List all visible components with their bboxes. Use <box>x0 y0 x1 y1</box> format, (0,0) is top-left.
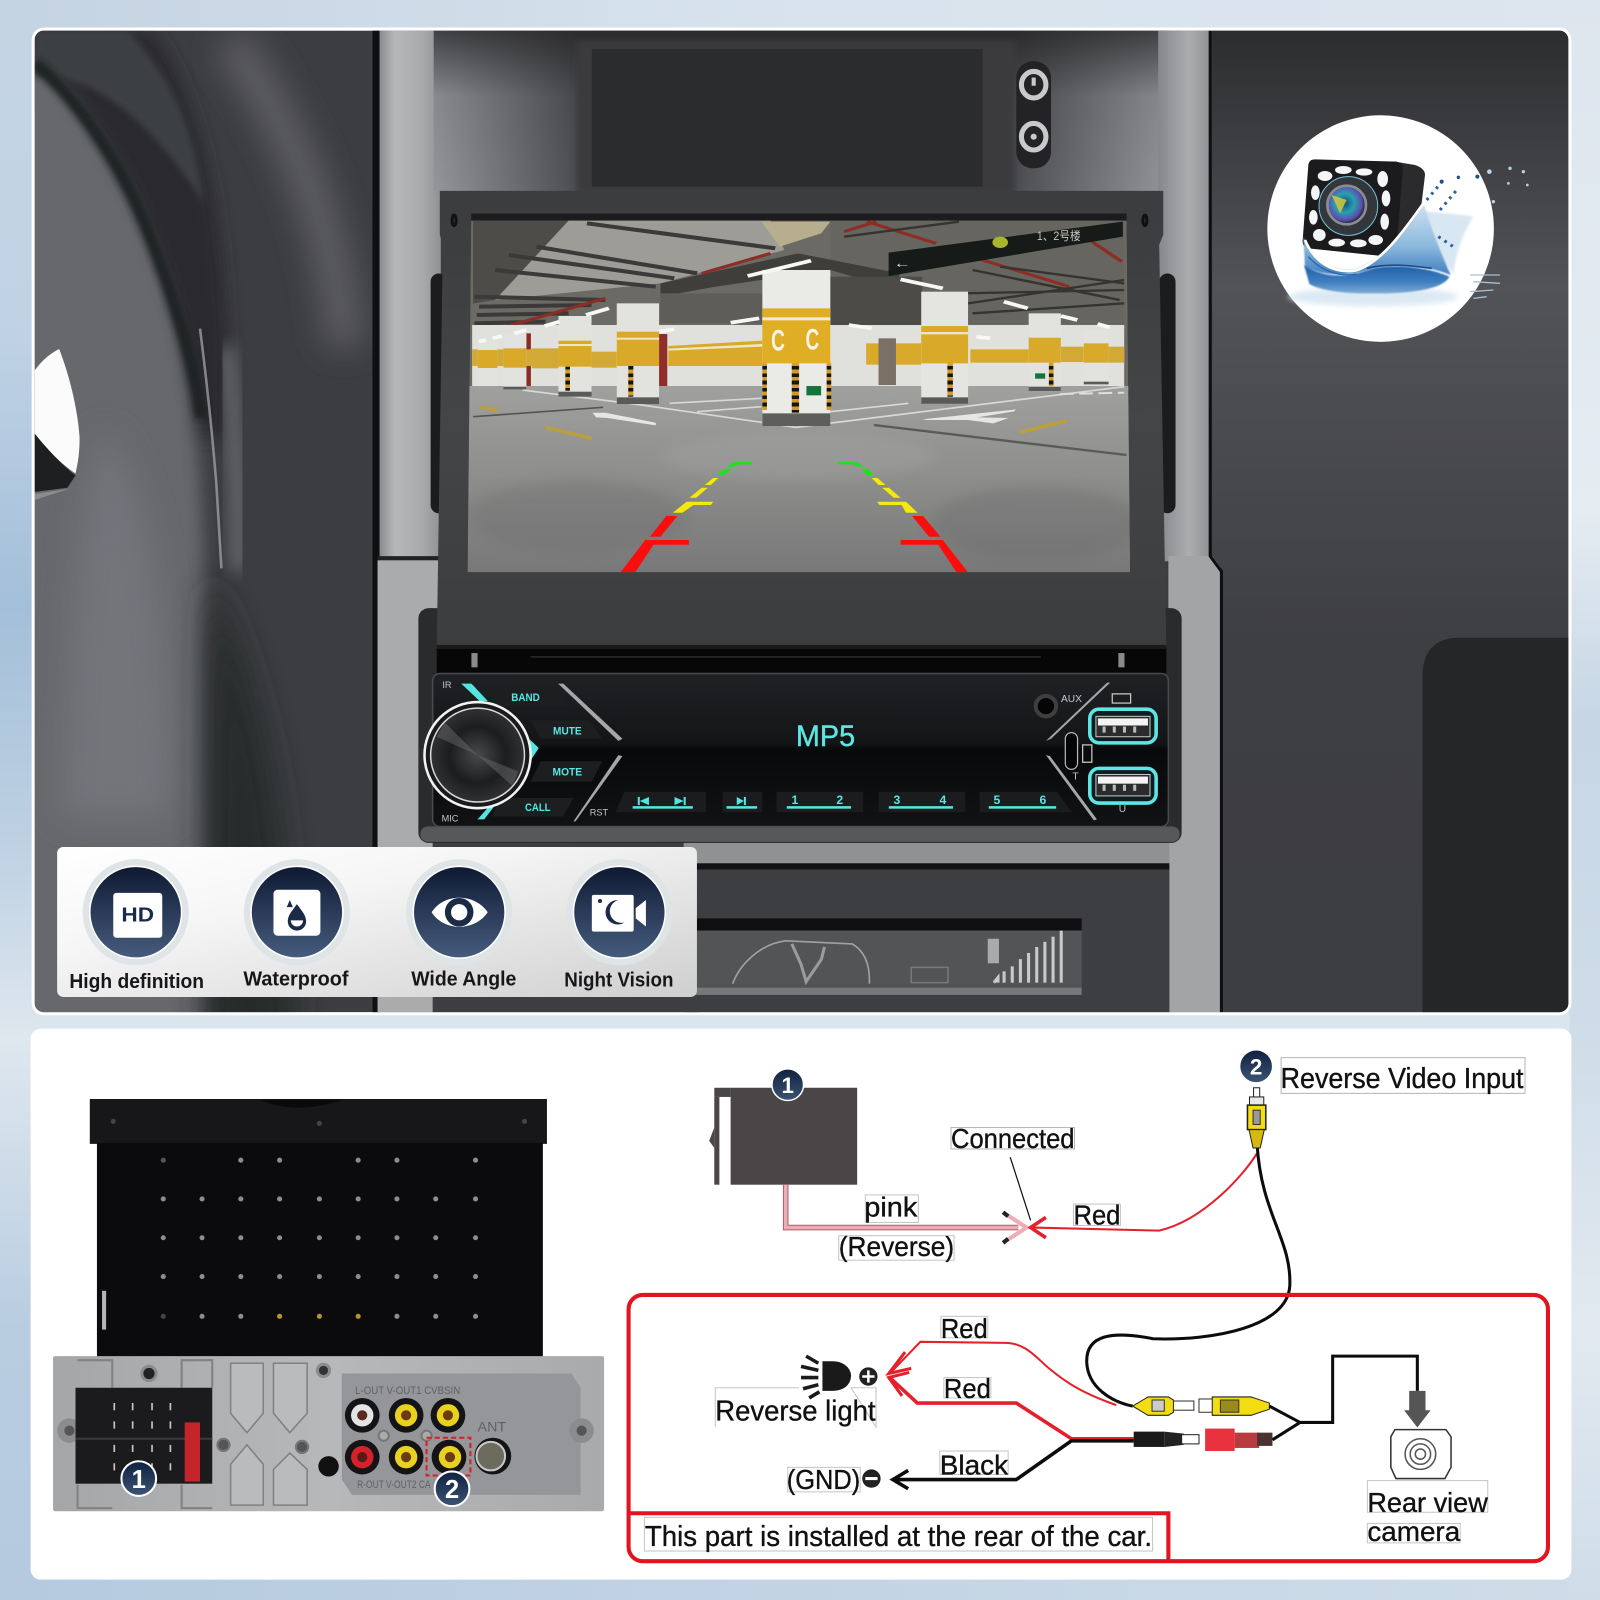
aluminium rear plate <box>53 1356 604 1511</box>
badge 1: 1 <box>782 1073 794 1098</box>
faceplate labels: CALL <box>525 802 551 814</box>
icon: waterproof rear camera <box>1267 115 1529 342</box>
label: rear view camera: camera <box>1367 1516 1461 1547</box>
badge 2 on photo: 2 <box>445 1476 459 1504</box>
faceplate labels: BAND <box>511 692 540 704</box>
panel: wiring guide <box>31 1029 1571 1580</box>
icon: ground minus <box>862 1469 881 1488</box>
label: rear view camera: Rear view <box>1367 1487 1488 1518</box>
labels <box>644 1058 1525 1553</box>
cyan accents <box>461 684 539 819</box>
label: ground: (GND) <box>787 1464 860 1495</box>
feature: high definition <box>69 859 204 993</box>
port labels: L-OUT V-OUT1 CVBSIN <box>355 1385 460 1397</box>
lower tray <box>684 843 1169 1012</box>
water splash <box>1288 167 1529 306</box>
ceiling <box>468 221 1133 391</box>
silver centre console left <box>380 31 441 557</box>
head unit faceplate: MIC <box>442 813 459 823</box>
bezel screws <box>452 215 1147 226</box>
label: red trigger: Red <box>1073 1199 1120 1230</box>
side buttons <box>484 688 602 816</box>
label: pink: pink <box>864 1191 918 1222</box>
head unit faceplate <box>424 673 1168 827</box>
feature: wide angle: Wide Angle <box>411 969 516 991</box>
feature: high definition: High definition <box>69 971 204 993</box>
arrow to camera <box>1404 1391 1431 1428</box>
faceplate labels: 3 <box>894 793 901 807</box>
faceplate labels <box>511 692 1046 814</box>
red arrowheads <box>889 1352 911 1396</box>
badge 2 on photo <box>435 1471 469 1506</box>
head unit faceplate: RST <box>590 807 609 817</box>
faceplate labels: 5 <box>994 793 1001 807</box>
feature: night vision <box>564 859 673 992</box>
note: rear installation: This part is installed at the rear of the car. <box>645 1521 1152 1553</box>
dashed highlight on port 2 <box>427 1438 470 1476</box>
faceplate labels: MP5 <box>796 720 855 753</box>
faceplate labels: 2 <box>836 793 843 807</box>
port labels: ANT <box>478 1420 506 1436</box>
label: black: Black <box>940 1449 1008 1480</box>
ISO wiring connector <box>76 1388 212 1484</box>
floor <box>468 386 1143 572</box>
parking camera view on screen <box>468 213 1143 573</box>
car interior background <box>10 31 1568 1061</box>
head unit faceplate: AUX <box>1061 694 1082 705</box>
feature: waterproof <box>243 859 350 991</box>
silver console right <box>1158 31 1209 561</box>
rear installation frame <box>629 1295 1548 1561</box>
reverse video plug <box>1247 1088 1266 1148</box>
steering wheel logo highlight <box>35 349 80 473</box>
feature: high definition: HD <box>121 904 154 926</box>
pillars: C <box>771 325 785 357</box>
photo: rear of head unit <box>53 1099 604 1511</box>
feature: waterproof: Waterproof <box>243 969 349 991</box>
badge 2: 2 <box>1250 1054 1262 1079</box>
badge 1 <box>772 1069 804 1101</box>
label: connected: Connected <box>951 1123 1074 1154</box>
right lower vent block <box>1422 638 1568 1012</box>
icon: rear view camera <box>1391 1430 1451 1479</box>
feature: wide angle <box>406 859 516 991</box>
fuse <box>185 1422 200 1482</box>
label: red thick wire: Red <box>944 1373 991 1404</box>
preset button lines <box>633 797 1056 809</box>
direction sign: 1、2号楼 <box>1037 229 1081 243</box>
dash buttons <box>1016 61 1051 168</box>
badge 2 <box>1240 1051 1272 1082</box>
faceplate labels: 1 <box>791 793 798 807</box>
steering wheel <box>10 31 345 1061</box>
RCA power pair <box>1134 1429 1272 1451</box>
black video cable <box>1087 1145 1290 1406</box>
folded screen back <box>90 1099 547 1357</box>
port labels <box>355 1385 506 1491</box>
wiring diagram <box>629 1051 1548 1561</box>
panel: feature icons <box>57 847 697 997</box>
direction sign <box>889 222 1123 276</box>
feature: night vision: Night Vision <box>564 970 673 992</box>
RCA ports <box>345 1398 511 1474</box>
thick red wire to reverse light <box>891 1379 1134 1439</box>
back wall <box>472 325 1124 386</box>
icon: reverse lamp <box>801 1356 878 1398</box>
volume knob <box>424 702 531 808</box>
head unit faceplate: IR <box>442 680 452 690</box>
reversing guide lines <box>620 462 968 572</box>
thin red wire to reverse light <box>891 1342 1116 1405</box>
camera body <box>1303 159 1425 257</box>
label: red thin wire: Red <box>941 1313 988 1344</box>
camera cable junction <box>1269 1356 1417 1440</box>
head unit block <box>709 1088 857 1185</box>
faceplate labels: 4 <box>939 793 946 807</box>
RCA yellow pair <box>1133 1397 1269 1415</box>
screen bezel <box>437 191 1166 648</box>
label: reverse light: Reverse light <box>715 1395 876 1427</box>
pink reverse wire <box>786 1185 1027 1243</box>
retractable screen side wheels <box>431 273 1176 513</box>
faceplate labels: MOTE <box>553 767 583 779</box>
label: reverse: (Reverse) <box>839 1231 954 1262</box>
red trigger wire <box>1031 1153 1257 1238</box>
usb-c port <box>1065 694 1131 769</box>
pillars <box>478 270 1109 426</box>
badge 1 on photo: 1 <box>132 1466 146 1494</box>
usb port upper <box>1090 709 1156 743</box>
label: reverse video input: Reverse Video Input <box>1281 1063 1524 1095</box>
faceplate labels: MUTE <box>553 726 582 738</box>
port labels: R-OUT V-OUT2 CA <box>357 1479 431 1491</box>
faceplate chevrons <box>558 683 1110 821</box>
label: rear view camera <box>1367 1481 1488 1547</box>
head unit surround <box>418 608 1182 843</box>
preset button plates <box>615 792 1071 812</box>
upper display recess <box>592 49 983 187</box>
right dashboard <box>1212 31 1568 1012</box>
connected pointer line <box>1010 1157 1031 1220</box>
badge 1 on photo <box>121 1461 156 1496</box>
black ground wire <box>893 1441 1134 1489</box>
pillars: C <box>806 324 819 356</box>
aux jack <box>1036 696 1056 716</box>
centre console top <box>434 31 1168 194</box>
faceplate labels: 6 <box>1039 793 1046 807</box>
usb port lower <box>1090 768 1156 803</box>
direction sign: ← <box>894 257 911 271</box>
ceiling lights <box>479 261 1109 342</box>
disc slot under screen <box>437 645 1166 673</box>
head unit faceplate: U <box>1119 804 1126 815</box>
head unit faceplate: T <box>1072 772 1079 783</box>
